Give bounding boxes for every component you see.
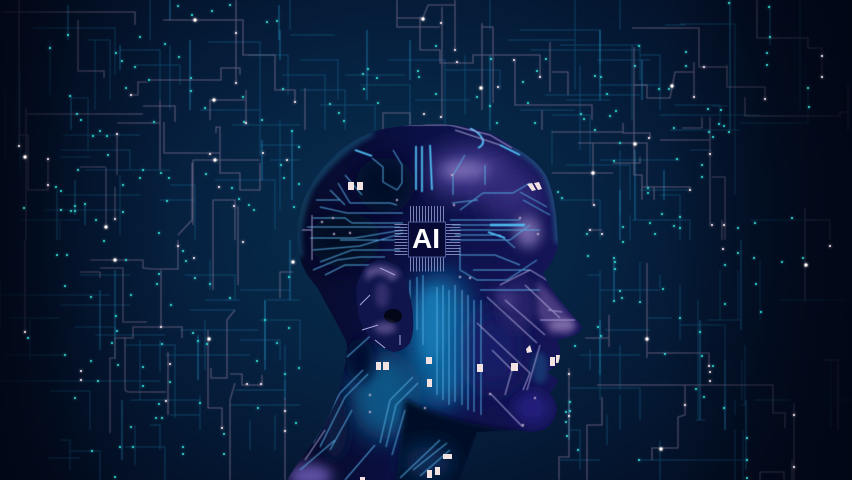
head: white square pads bbox=[348, 182, 561, 480]
head: AI circuit profile bbox=[287, 124, 582, 480]
chip: AI processor bbox=[401, 214, 453, 264]
head: pad dots bbox=[322, 175, 538, 425]
head: bright blue traces bbox=[355, 128, 525, 238]
head shading and highlights bbox=[288, 125, 578, 480]
head: ear bbox=[356, 260, 413, 352]
chip pins bbox=[401, 214, 453, 264]
chip label: AI bbox=[412, 223, 440, 254]
head silhouette bbox=[287, 124, 582, 480]
head: blue circuit traces bbox=[300, 150, 550, 480]
chip body bbox=[408, 222, 446, 257]
head: lavender traces bbox=[302, 125, 575, 460]
